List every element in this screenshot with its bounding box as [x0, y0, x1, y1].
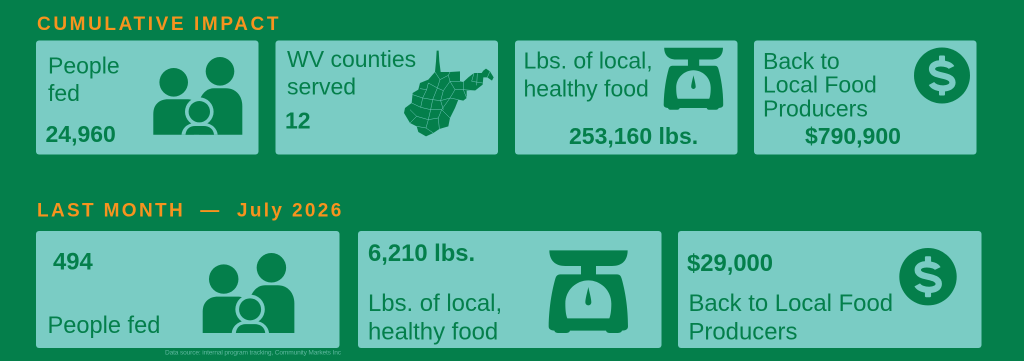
panel: pounds of food cumulative: [515, 40, 738, 154]
icon: kitchen scale: [664, 48, 723, 110]
footnote: data source: Data source: internal program tracking, Community Markets Inc: [165, 349, 342, 356]
panel: dollars to producers cumulative: Local Food: [763, 72, 877, 98]
value: 6,210 lbs: 6,210 lbs.: [368, 240, 475, 267]
label: people fed: People: [48, 52, 120, 78]
panel: dollars to producers last month: [678, 231, 982, 348]
value: 253,160 lbs: 253,160 lbs.: [569, 123, 698, 149]
label: back to local food producers: Back to Local Food: [688, 290, 893, 317]
panel: pounds of food cumulative: healthy food: [524, 76, 649, 102]
panel: dollars to producers cumulative: Producers: [763, 96, 868, 122]
value: $29,000: $29,000: [687, 250, 773, 277]
panel: pounds of food last month: healthy food: [368, 318, 498, 346]
panel: WV counties served: [276, 40, 498, 154]
panel: people fed cumulative: fed: [48, 80, 80, 106]
value: 494: 494: [53, 248, 93, 276]
label: WV counties served: WV counties: [287, 46, 416, 72]
panel: people fed last month: [36, 231, 340, 348]
value: $790,900: $790,900: [805, 123, 901, 149]
label: back to local food producers: Back to: [763, 48, 840, 74]
heading: cumulative impact: CUMULATIVE IMPACT: [37, 14, 281, 35]
label: lbs of local healthy food: Lbs. of local,: [368, 290, 502, 317]
panel: people fed cumulative: [36, 40, 258, 154]
panel: dollars to producers cumulative: [754, 40, 976, 154]
panel: pounds of food last month: [358, 231, 662, 348]
panel: WV counties served: served: [287, 74, 356, 100]
icon: family: [203, 253, 294, 333]
panel: dollars to producers last month: Producers: [688, 318, 797, 346]
icon: dollar coin: [914, 48, 970, 104]
value: 12: 12: [285, 108, 311, 134]
label: lbs of local healthy food: Lbs. of local,: [524, 48, 653, 74]
icon: kitchen scale: [549, 250, 628, 333]
icon: family: [153, 57, 242, 135]
value: 24,960: 24,960: [46, 121, 116, 147]
heading: last month: LAST MONTH — July 2026: [37, 201, 344, 222]
icon: West Virginia county map: [404, 51, 494, 136]
label: people fed: People fed: [48, 313, 160, 339]
icon: dollar coin: [899, 248, 957, 305]
